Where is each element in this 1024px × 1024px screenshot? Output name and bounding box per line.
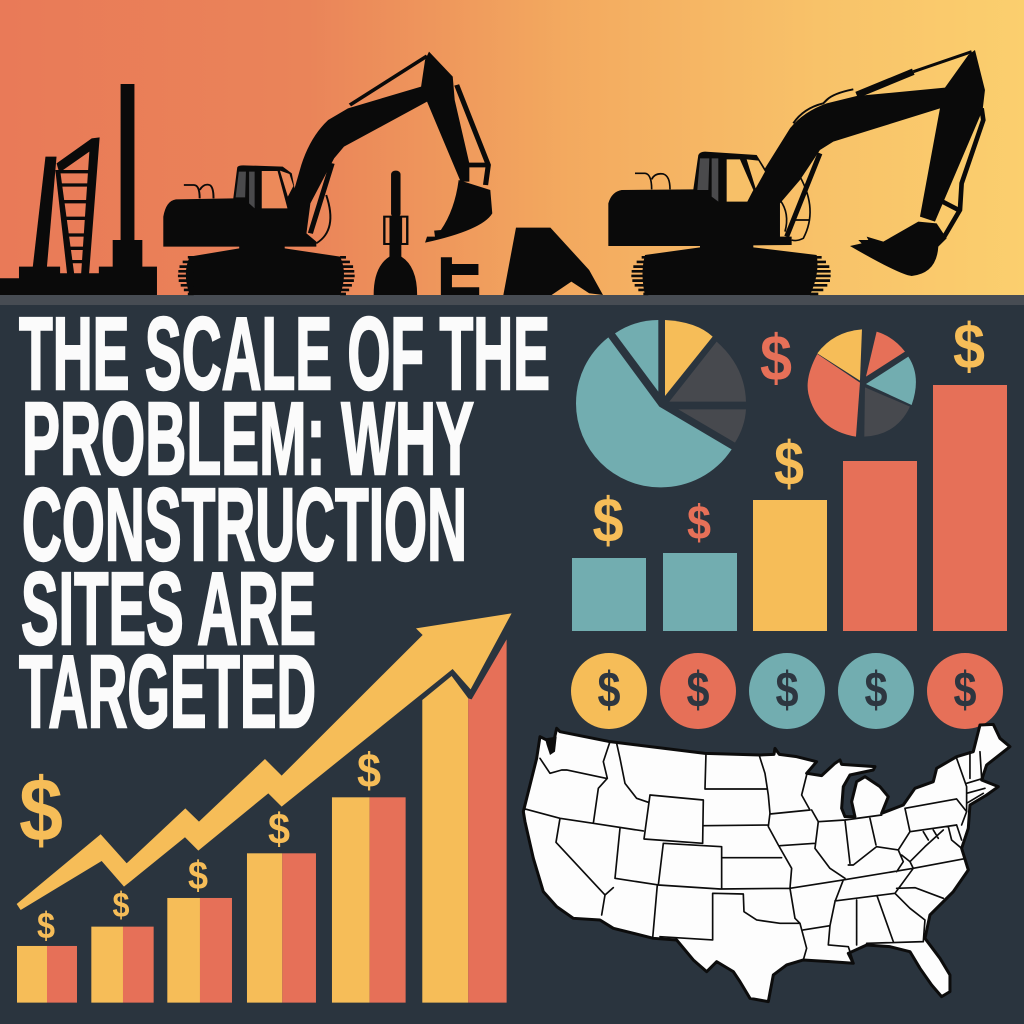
icon row: dollar coins: $: [954, 662, 977, 718]
arrow: rising trend: [17, 613, 512, 910]
bar chart: rising bars bottom left: [17, 639, 507, 1003]
title: TARGETED: [19, 634, 316, 749]
bar chart: right: [572, 310, 1007, 631]
icons: dollar signs above rising bars: $: [188, 854, 208, 898]
icon: left construction silhouettes: [0, 84, 603, 295]
icons: dollar signs above rising bars: $: [19, 761, 63, 861]
icon: right excavator: [608, 50, 985, 295]
icon: red dollar sign: $: [760, 321, 792, 394]
bar chart: right: $: [953, 310, 985, 382]
bar chart: right: $: [592, 486, 624, 556]
icon row: dollar coins: $: [598, 662, 621, 718]
ground band: [0, 295, 1024, 305]
pie chart: small: [808, 329, 916, 437]
icons: dollar signs above rising bars: $: [37, 905, 55, 946]
map: United States states outline: [523, 724, 1010, 1002]
icons: dollar signs above rising bars: [19, 745, 381, 946]
pie chart: large: [576, 320, 746, 487]
title: PROBLEM: WHY: [22, 381, 474, 496]
title: [19, 296, 550, 749]
icon row: dollar coins: $: [776, 662, 799, 718]
bar chart: right: $: [774, 430, 804, 499]
bar chart: right: $: [687, 497, 711, 550]
icons: dollar signs above rising bars: $: [112, 886, 130, 925]
title: THE SCALE OF THE: [19, 296, 550, 411]
title: CONSTRUCTION: [22, 467, 467, 582]
icon row: dollar coins: $: [686, 662, 710, 718]
panel: sunset sky banner: [0, 0, 1024, 296]
icon row: dollar coins: $: [864, 662, 888, 718]
icons: dollar signs above rising bars: $: [268, 805, 290, 854]
title: SITES ARE: [21, 551, 316, 666]
icon row: dollar coins: [571, 653, 1003, 729]
icon: left excavator: [163, 52, 492, 295]
icons: dollar signs above rising bars: $: [357, 745, 381, 798]
